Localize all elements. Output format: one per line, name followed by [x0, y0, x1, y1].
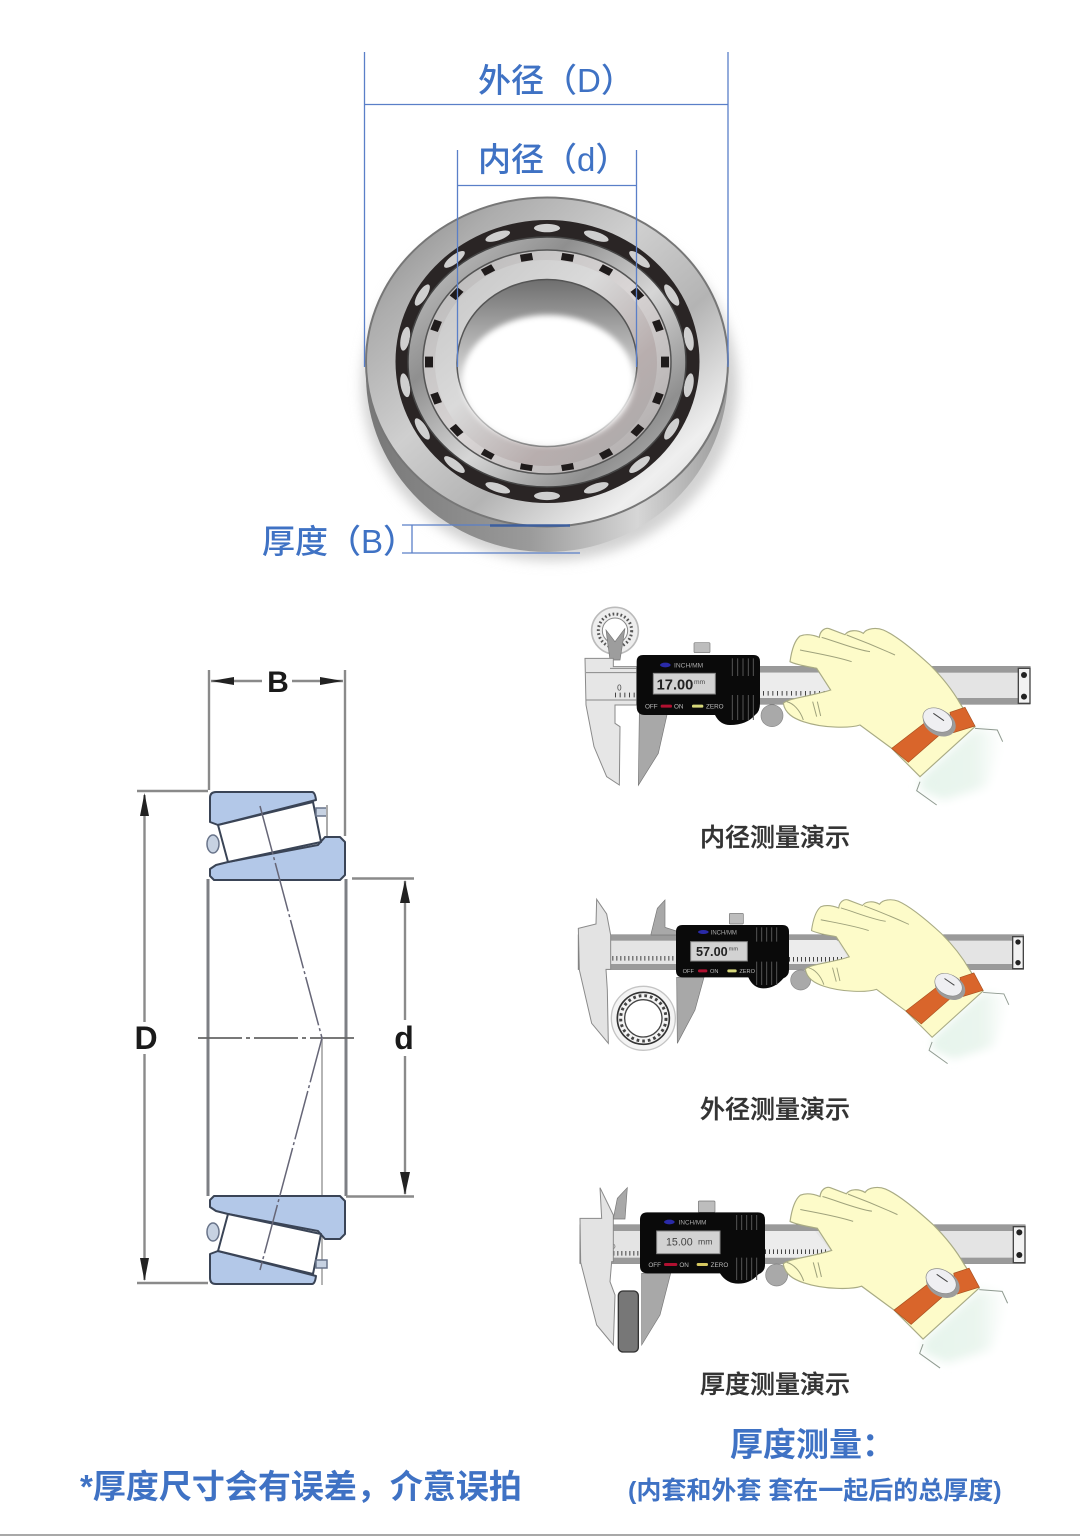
clamp screw	[698, 1201, 715, 1212]
dimension d	[346, 878, 414, 1196]
caption: inner diameter demo: 内径测量演示	[700, 824, 850, 852]
gloved hand with watch	[783, 628, 1003, 805]
moving jaw	[651, 900, 704, 1043]
digital readout: ON	[710, 969, 718, 975]
section diagram: tapered roller bearing	[134, 666, 414, 1285]
caption: thickness demo: 厚度测量演示	[700, 1371, 850, 1399]
caliper demo: outer diameter	[578, 899, 1023, 1064]
bearing thickness side view	[618, 1291, 638, 1352]
dimension B	[209, 666, 345, 836]
moving jaw	[638, 713, 667, 785]
caliper demo: inner diameter	[585, 607, 1030, 805]
label: outer diameter: 外径（D）	[478, 62, 634, 99]
digital readout: INCH/MM	[679, 1219, 706, 1226]
fixed jaw and beam: 0	[617, 684, 622, 693]
digital readout	[676, 925, 789, 988]
digital readout: mm	[698, 1236, 712, 1246]
dimension lines: outer diameter	[364, 52, 728, 367]
digital readout: OFF	[648, 1262, 661, 1269]
moving jaw	[613, 1188, 671, 1345]
gloved hand with watch	[783, 1187, 1008, 1368]
caption: outer diameter demo: 外径测量演示	[700, 1096, 850, 1124]
photo: tapered roller bearing	[362, 198, 738, 561]
digital readout: OFF	[683, 969, 695, 975]
fixed jaw and beam	[585, 628, 637, 785]
rail	[578, 935, 1023, 969]
thumb knob	[791, 970, 811, 990]
digital readout: ZERO	[706, 704, 724, 711]
digital readout: 15.00	[666, 1237, 693, 1249]
digital readout: ON	[679, 1262, 689, 1269]
digital readout: INCH/MM	[711, 930, 737, 936]
upper bearing section	[207, 792, 345, 880]
digital readout: 57.00	[696, 945, 728, 959]
taper lines	[260, 806, 322, 1270]
gloved hand with watch	[805, 900, 1009, 1064]
clamp screw	[729, 913, 743, 924]
fixed jaw	[580, 1188, 615, 1345]
clamp screw	[694, 643, 710, 653]
rail	[758, 667, 1030, 704]
note: thickness tolerance: *厚度尺寸会有误差，介意误拍	[80, 1468, 522, 1505]
digital readout: INCH/MM	[674, 663, 703, 670]
dimension B: B	[267, 666, 289, 699]
bearing between jaws	[611, 986, 675, 1050]
heading: thickness measurement: 厚度测量：	[730, 1426, 895, 1463]
digital readout: 17.00	[657, 677, 693, 693]
digital readout: mm	[729, 947, 738, 953]
lower bearing section	[207, 1196, 345, 1284]
bottom edge strip	[0, 1534, 1080, 1536]
digital readout: ZERO	[739, 969, 756, 975]
digital readout: mm	[694, 679, 706, 686]
digital readout	[637, 655, 760, 725]
digital readout: ZERO	[711, 1262, 728, 1269]
digital readout: OFF	[645, 704, 658, 711]
thumb knob	[761, 705, 783, 727]
rail	[580, 1225, 1025, 1263]
thumb knob	[766, 1264, 788, 1286]
dimension D	[134, 791, 208, 1283]
dimension lines: inner diameter	[458, 150, 636, 367]
caliper demo: thickness	[580, 1187, 1025, 1368]
note: total thickness: (内套和外套 套在一起后的总厚度)	[628, 1477, 1002, 1505]
dimension lines: thickness	[402, 525, 580, 553]
fixed jaw	[578, 899, 611, 1043]
dimension d: d	[394, 1020, 414, 1056]
bearing in jaws	[592, 607, 638, 654]
dimension D: D	[134, 1020, 158, 1056]
digital readout	[640, 1212, 765, 1284]
label: thickness: 厚度（B）	[262, 523, 416, 560]
bore lines and centre lines	[198, 879, 355, 1285]
label: inner diameter: 内径（d）	[478, 141, 628, 178]
digital readout: ON	[674, 704, 684, 711]
